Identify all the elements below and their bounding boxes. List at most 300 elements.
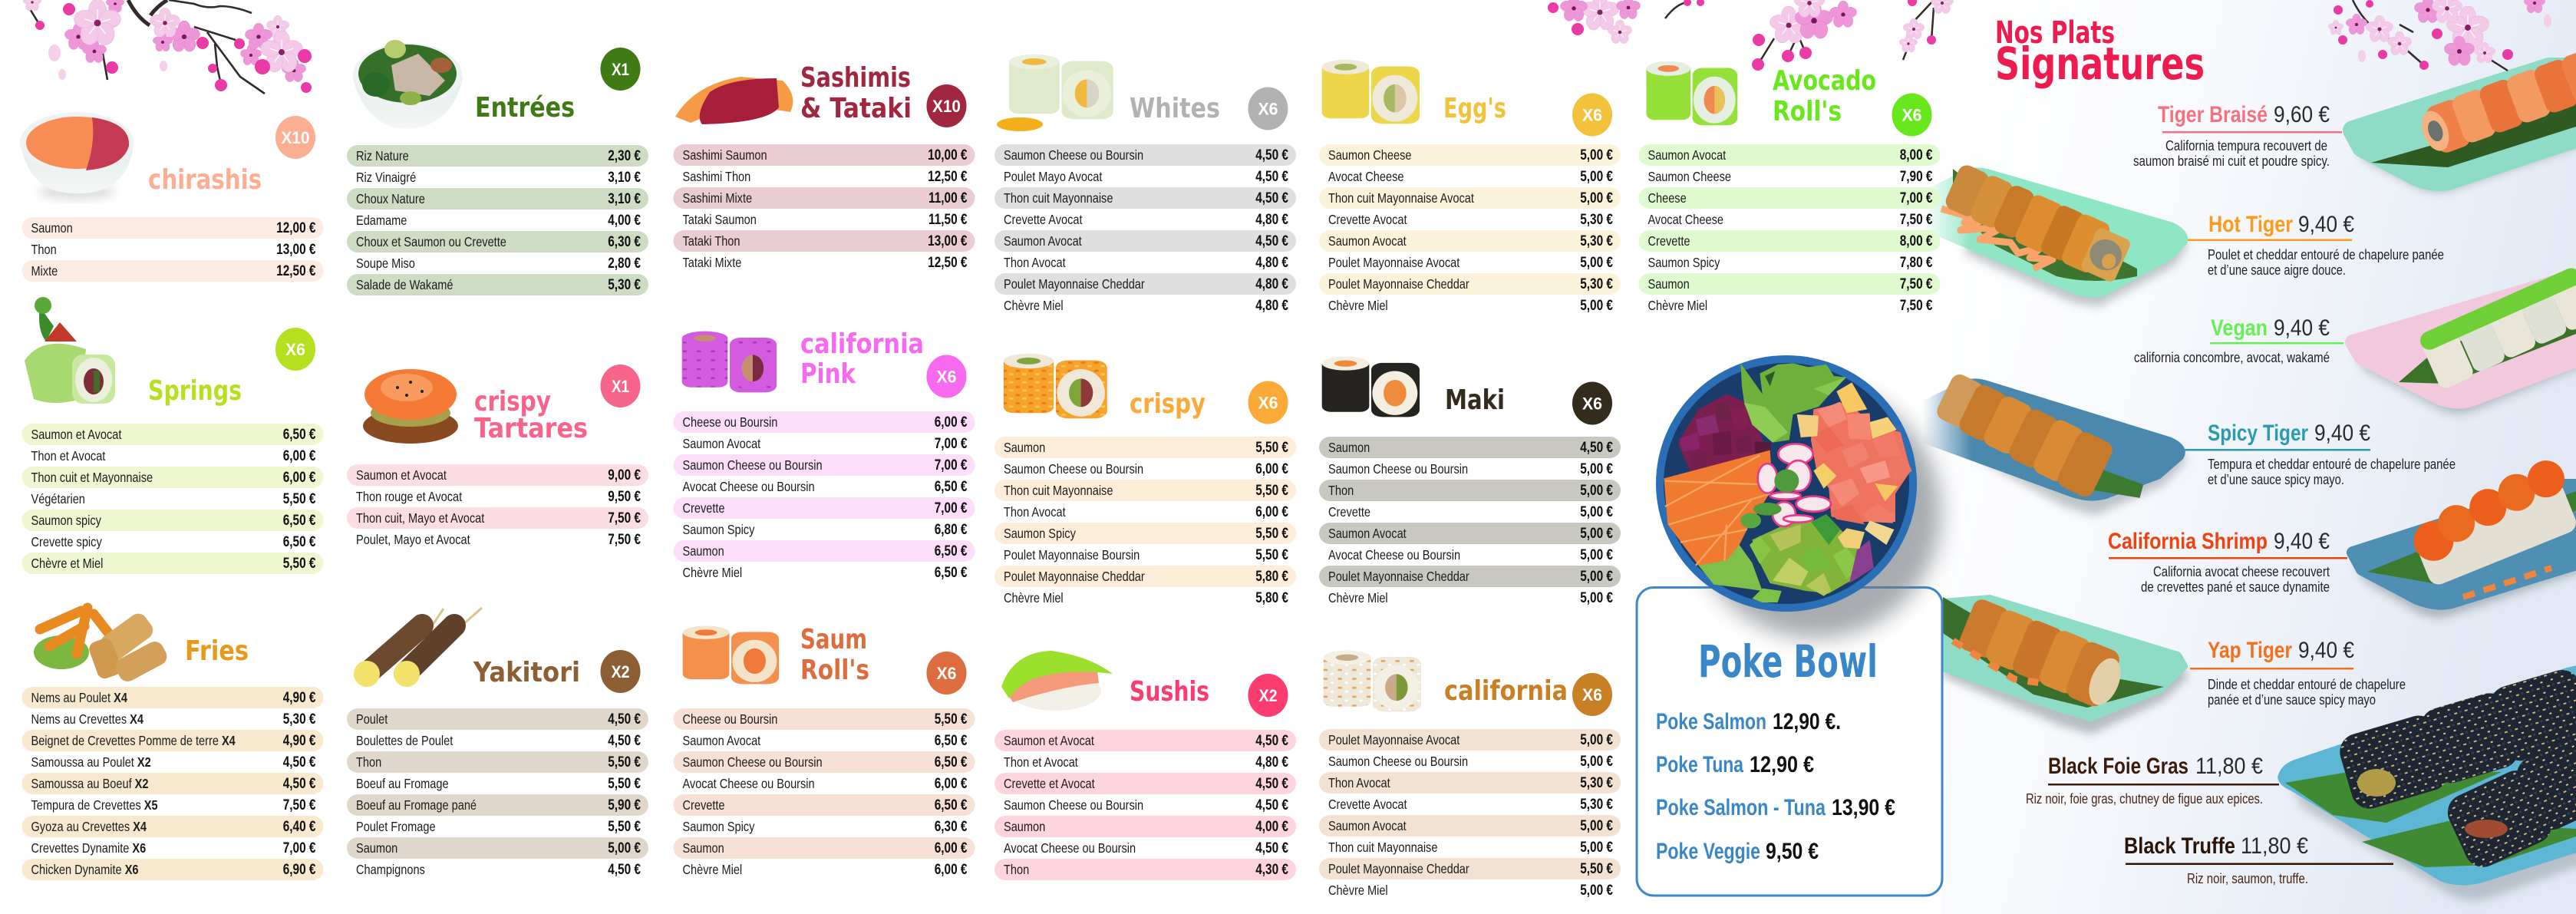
price list: entrées: 5,30 € bbox=[608, 276, 641, 292]
heading: poke bowl: Poke Bowl bbox=[1698, 635, 1878, 688]
plate: Black rolls bbox=[2278, 662, 2576, 901]
price list: california pink: Crevette bbox=[682, 501, 725, 516]
price list: avocado rolls: 8,00 € bbox=[1900, 146, 1933, 163]
image: fries bbox=[34, 608, 170, 685]
price list: saum rolls: Cheese ou Boursin bbox=[682, 712, 777, 727]
price list: yakitori: Saumon bbox=[356, 841, 397, 856]
price list: saum rolls: 6,00 € bbox=[935, 839, 968, 856]
illustration: cherry blossom top left bbox=[23, 0, 312, 94]
price list: avocado rolls bbox=[1639, 144, 1940, 313]
heading: crispy tartares: Tartares bbox=[474, 413, 588, 444]
price list: sushis: Crevette et Avocat bbox=[1004, 777, 1095, 791]
price list: springs: 6,00 € bbox=[283, 468, 316, 485]
price list: maki: 4,50 € bbox=[1580, 438, 1613, 455]
price list: crispy: 5,50 € bbox=[1255, 438, 1288, 455]
price list: crispy: Poulet Mayonnaise Cheddar bbox=[1004, 569, 1145, 584]
price list: fries: Nems au Crevettes X4 bbox=[31, 712, 144, 727]
price list: chirashis: 13,00 € bbox=[276, 240, 316, 257]
heading: eggs: Egg's bbox=[1443, 93, 1506, 124]
image: white rolls bbox=[997, 54, 1113, 131]
price list: sashimis: Tataki Saumon bbox=[682, 213, 757, 227]
item: california shrimp: California Shrimp bbox=[2108, 529, 2268, 554]
price list: california pink: 6,50 € bbox=[935, 563, 968, 580]
price list: sashimis: 13,00 € bbox=[928, 232, 968, 249]
item: black truffe: Black Truffe bbox=[2124, 833, 2235, 859]
price list: chirashis bbox=[21, 217, 324, 282]
price list: crispy: Saumon bbox=[1004, 441, 1045, 455]
price list: avocado rolls: 7,90 € bbox=[1900, 167, 1933, 184]
price list: california pink: Saumon bbox=[682, 544, 724, 559]
price list: entrées: 4,00 € bbox=[608, 211, 641, 228]
price list: california: Saumon Avocat bbox=[1328, 819, 1407, 833]
price list: yakitori: Boulettes de Poulet bbox=[356, 734, 454, 748]
item: tiger braisé: Tiger Braisé bbox=[2158, 102, 2268, 127]
price list: fries: Chicken Dynamite X6 bbox=[31, 863, 139, 877]
price list: avocado rolls: Saumon Cheese bbox=[1648, 170, 1731, 184]
price list: california: Thon cuit Mayonnaise bbox=[1328, 840, 1437, 855]
item: california shrimp bbox=[2108, 529, 2347, 595]
price list: yakitori: Thon bbox=[356, 755, 381, 770]
item: hot tiger: Poulet et cheddar entouré de chapelure panée bbox=[2208, 247, 2444, 262]
price list: sushis: 4,50 € bbox=[1255, 731, 1288, 748]
price list: yakitori: 4,50 € bbox=[608, 860, 641, 877]
price list: california pink: 6,80 € bbox=[935, 520, 968, 537]
badge: X1: X1 bbox=[612, 60, 629, 79]
price list: avocado rolls: 7,50 € bbox=[1900, 275, 1933, 292]
heading: springs: Springs bbox=[148, 375, 242, 407]
item: vegan bbox=[2134, 315, 2343, 365]
price list: sashimis: Tataki Mixte bbox=[682, 256, 741, 270]
price list: crispy: 6,00 € bbox=[1255, 460, 1288, 477]
price list: crispy: Chèvre Miel bbox=[1004, 591, 1064, 605]
price list: sashimis: 10,00 € bbox=[928, 146, 968, 163]
price list: fries: 6,90 € bbox=[283, 860, 316, 877]
panel: chirashis bbox=[20, 112, 324, 282]
panel: crispy tartares bbox=[347, 365, 648, 547]
price list: california pink: 6,50 € bbox=[935, 477, 968, 494]
price list: fries bbox=[21, 687, 324, 880]
price list: springs: Végétarien bbox=[31, 492, 85, 506]
item: black truffe bbox=[2124, 833, 2393, 886]
item: california shrimp: de crevettes pané et sauce dynamite bbox=[2141, 579, 2330, 595]
price list: eggs: 5,00 € bbox=[1580, 189, 1613, 206]
panel: entrées bbox=[347, 40, 648, 295]
price list: sashimis: Sashimi Mixte bbox=[682, 191, 752, 206]
price list: fries: 4,50 € bbox=[283, 774, 316, 791]
price list: california: Poulet Mayonnaise Cheddar bbox=[1328, 862, 1469, 876]
image: salmon rolls bbox=[683, 626, 779, 684]
item: black truffe: 11,80 € bbox=[2241, 833, 2308, 859]
price list: crispy: 5,80 € bbox=[1255, 567, 1288, 584]
price list: springs: 6,00 € bbox=[283, 447, 316, 464]
badge: X6 bbox=[927, 652, 967, 695]
badge: X6: X6 bbox=[1582, 394, 1602, 413]
price list: crispy: 6,00 € bbox=[1255, 503, 1288, 520]
price list: avocado rolls: Avocat Cheese bbox=[1648, 213, 1723, 227]
price list: eggs: Poulet Mayonnaise Avocat bbox=[1328, 256, 1460, 270]
price list: sushis: Saumon et Avocat bbox=[1004, 734, 1094, 748]
badge: X2: X2 bbox=[1258, 686, 1277, 705]
item: poke veggie: Poke Veggie bbox=[1656, 839, 1760, 864]
price list: saum rolls: Saumon Spicy bbox=[682, 820, 755, 834]
price list: crispy: Poulet Mayonnaise Boursin bbox=[1004, 548, 1140, 563]
price list: eggs: Avocat Cheese bbox=[1328, 170, 1403, 184]
price list: maki: Thon bbox=[1328, 483, 1354, 498]
item: yap tiger: 9,40 € bbox=[2298, 638, 2354, 663]
price list: california pink: Chèvre Miel bbox=[682, 566, 742, 580]
price list: eggs: 5,00 € bbox=[1580, 167, 1613, 184]
price list: avocado rolls: Saumon Avocat bbox=[1648, 148, 1727, 163]
plate: Spicy Tiger bbox=[1918, 368, 2187, 516]
price list: saum rolls: 6,30 € bbox=[935, 817, 968, 834]
price list: entrées: Edamame bbox=[356, 213, 407, 228]
price list: yakitori bbox=[347, 708, 648, 877]
price list: entrées: Salade de Wakamé bbox=[356, 278, 454, 292]
illustration: cherry blossom top centre bbox=[1548, 0, 1954, 71]
price list: yakitori: 5,00 € bbox=[608, 839, 641, 856]
heading: crispy tartares: crispy bbox=[474, 386, 551, 417]
price list: crispy: Thon Avocat bbox=[1004, 505, 1066, 520]
badge: X1 bbox=[600, 365, 640, 408]
heading: sashimis & tataki: Sashimis bbox=[800, 62, 911, 94]
price list: crispy tartares bbox=[347, 464, 648, 547]
price list: saum rolls: 6,50 € bbox=[935, 753, 968, 770]
price list: entrées: Riz Nature bbox=[356, 149, 409, 163]
image: salad bowl bbox=[353, 40, 463, 129]
image: sushi bbox=[1001, 651, 1113, 711]
heading: entrées: Entrées bbox=[475, 92, 575, 124]
image: crispy rolls bbox=[1004, 354, 1107, 418]
price list: whites: 4,80 € bbox=[1255, 296, 1288, 313]
item: yap tiger: Dinde et cheddar entouré de chapelure bbox=[2208, 677, 2406, 692]
panel: springs bbox=[21, 297, 324, 574]
price list: avocado rolls: 7,80 € bbox=[1900, 253, 1933, 270]
item: poke tuna: Poke Tuna bbox=[1656, 752, 1743, 777]
heading: nos plats signatures: Nos Plats bbox=[1995, 15, 2115, 51]
item: hot tiger: Hot Tiger bbox=[2208, 212, 2293, 237]
price list: maki: Saumon bbox=[1328, 441, 1370, 455]
image: yakitori skewers bbox=[354, 608, 482, 687]
price list: eggs: 5,00 € bbox=[1580, 146, 1613, 163]
price list: springs: 6,50 € bbox=[283, 533, 316, 549]
price list: yakitori: Poulet bbox=[356, 712, 388, 727]
price list: eggs: 5,00 € bbox=[1580, 296, 1613, 313]
price list: maki bbox=[1319, 437, 1621, 605]
item: spicy tiger: Spicy Tiger bbox=[2208, 421, 2308, 446]
price list: california pink: Avocat Cheese ou Boursin bbox=[682, 480, 815, 494]
price list: saum rolls: 6,00 € bbox=[935, 860, 968, 877]
plate: Tiger Braisé bbox=[2353, 48, 2576, 192]
price list: entrées: Choux Nature bbox=[356, 192, 425, 206]
price list: springs: Saumon spicy bbox=[31, 513, 102, 528]
price list: whites: Poulet Mayo Avocat bbox=[1004, 170, 1103, 184]
item: poke salmon tuna: 13,90 € bbox=[1832, 795, 1895, 820]
badge: X6 bbox=[1248, 87, 1288, 130]
price list: whites: Saumon Cheese ou Boursin bbox=[1004, 148, 1143, 163]
price list: saum rolls bbox=[674, 708, 975, 877]
price list: avocado rolls: 7,00 € bbox=[1900, 189, 1933, 206]
plate: California Shrimp bbox=[2353, 455, 2576, 618]
price list: saum rolls: Saumon Avocat bbox=[682, 734, 761, 748]
price list: sushis: 4,50 € bbox=[1255, 796, 1288, 813]
price list: california pink: Saumon Avocat bbox=[682, 437, 761, 451]
price list: chirashis: 12,50 € bbox=[276, 262, 316, 279]
item: california shrimp: California avocat cheese recouvert bbox=[2153, 564, 2330, 579]
price list: entrées: Soupe Miso bbox=[356, 256, 415, 271]
price list: fries: Tempura de Crevettes X5 bbox=[31, 798, 158, 813]
price list: springs: Saumon et Avocat bbox=[31, 427, 122, 442]
price list: sushis: Thon et Avocat bbox=[1004, 755, 1078, 770]
badge: X2: X2 bbox=[611, 662, 629, 681]
price list: crispy: 5,50 € bbox=[1255, 546, 1288, 563]
price list: springs bbox=[21, 424, 324, 574]
badge: X6 bbox=[1248, 381, 1288, 424]
price list: eggs: Saumon Cheese bbox=[1328, 148, 1411, 163]
price list: california pink: Saumon Cheese ou Boursin bbox=[682, 458, 823, 473]
price list: california: Saumon Cheese ou Boursin bbox=[1328, 754, 1468, 769]
price list: fries: Samoussa au Poulet X2 bbox=[31, 755, 151, 770]
price list: sashimis: Tataki Thon bbox=[682, 234, 740, 249]
price list: california pink: 6,00 € bbox=[935, 413, 968, 430]
price list: whites: 4,50 € bbox=[1255, 232, 1288, 249]
panel: avocado rolls bbox=[1639, 61, 1940, 313]
price list: springs: Crevette spicy bbox=[31, 535, 102, 549]
image: poke bowl bbox=[1656, 355, 1941, 638]
heading: crispy tartares bbox=[474, 386, 588, 444]
price list: entrées: 2,30 € bbox=[608, 147, 641, 163]
price list: crispy tartares: Saumon et Avocat bbox=[356, 468, 447, 483]
item: yap tiger bbox=[2190, 638, 2406, 708]
price list: crispy tartares: 7,50 € bbox=[608, 530, 641, 547]
heading: california pink bbox=[800, 328, 924, 390]
price list: eggs: Chèvre Miel bbox=[1328, 299, 1388, 313]
image: tartare bbox=[363, 369, 458, 444]
price list: yakitori: Boeuf au Fromage bbox=[356, 777, 449, 791]
panel: saum rolls bbox=[674, 624, 975, 877]
item: poke tuna: 12,90 € bbox=[1750, 752, 1814, 777]
heading: yakitori: Yakitori bbox=[473, 657, 580, 688]
heading: nos plats signatures bbox=[1995, 15, 2205, 90]
price list: sushis: 4,50 € bbox=[1255, 839, 1288, 856]
price list: sushis: 4,50 € bbox=[1255, 774, 1288, 791]
price list: entrées bbox=[347, 145, 648, 295]
badge: X10 bbox=[275, 116, 315, 159]
price list: fries: 4,90 € bbox=[283, 688, 316, 705]
badge: X6: X6 bbox=[1901, 106, 1921, 124]
panel: sashimis bbox=[674, 62, 975, 270]
heading: sashimis & tataki: & Tataki bbox=[800, 93, 912, 124]
price list: maki: Saumon Cheese ou Boursin bbox=[1328, 462, 1468, 477]
price list: whites: 4,80 € bbox=[1255, 275, 1288, 292]
price list: avocado rolls: Saumon Spicy bbox=[1648, 256, 1720, 270]
price list: avocado rolls: 7,50 € bbox=[1900, 210, 1933, 227]
price list: california: 5,30 € bbox=[1580, 795, 1613, 812]
price list: springs: Chèvre et Miel bbox=[31, 556, 103, 571]
price list: fries: 7,50 € bbox=[283, 796, 316, 813]
badge: X6: X6 bbox=[1258, 100, 1278, 118]
price list: saum rolls: 6,50 € bbox=[935, 796, 968, 813]
price list: yakitori: 5,50 € bbox=[608, 753, 641, 770]
price list: whites: 4,80 € bbox=[1255, 210, 1288, 227]
image: chirashi bowl bbox=[20, 112, 134, 200]
item: spicy tiger: 9,40 € bbox=[2314, 421, 2370, 446]
panel: signatures background bbox=[1941, 0, 2576, 914]
heading: sushis: Sushis bbox=[1130, 676, 1209, 708]
price list: sashimis: Sashimi Thon bbox=[682, 170, 750, 184]
price list: springs: 6,50 € bbox=[283, 425, 316, 442]
price list: california: 5,50 € bbox=[1580, 860, 1613, 876]
price list: eggs: 5,30 € bbox=[1580, 210, 1613, 227]
badge: X1: X1 bbox=[612, 377, 629, 396]
badge: X6 bbox=[1572, 673, 1612, 716]
price list: crispy: Saumon Cheese ou Boursin bbox=[1004, 462, 1143, 477]
item: yap tiger: Yap Tiger bbox=[2208, 638, 2292, 663]
panel: sushis bbox=[994, 651, 1296, 880]
price list: california pink: 6,50 € bbox=[935, 542, 968, 559]
price list: california: 5,30 € bbox=[1580, 774, 1613, 790]
price list: avocado rolls: 7,50 € bbox=[1900, 296, 1933, 313]
price list: crispy bbox=[994, 437, 1296, 605]
panel: eggs bbox=[1319, 60, 1621, 313]
price list: saum rolls: Crevette bbox=[682, 798, 725, 813]
item: black foie gras: Riz noir, foie gras, chutney de figue aux epices. bbox=[2026, 791, 2263, 807]
item: yap tiger: panée et d’une sauce spicy mayo bbox=[2208, 692, 2376, 708]
price list: entrées: 3,10 € bbox=[608, 168, 641, 185]
badge: X1 bbox=[600, 48, 640, 91]
item: poke salmon: Poke Salmon bbox=[1656, 709, 1766, 734]
price list: entrées: Riz Vinaigré bbox=[356, 170, 416, 185]
illustration: cherry blossom right panel bbox=[2328, 0, 2551, 71]
price list: fries: Nems au Poulet X4 bbox=[31, 691, 128, 705]
price list: sashimis: Sashimi Saumon bbox=[682, 148, 767, 163]
price list: california pink: 7,00 € bbox=[935, 456, 968, 473]
badge: X10 bbox=[927, 84, 967, 127]
badge: X6 bbox=[1572, 382, 1612, 425]
item: spicy tiger: et d’une sauce spicy mayo. bbox=[2208, 472, 2344, 487]
plate: Yap Tiger bbox=[1943, 596, 2188, 734]
price list: sashimis: 12,50 € bbox=[928, 253, 968, 270]
price list: eggs: Poulet Mayonnaise Cheddar bbox=[1328, 277, 1469, 292]
price list: saum rolls: 6,00 € bbox=[935, 774, 968, 791]
price list: sashimis bbox=[674, 144, 975, 270]
panel: whites bbox=[994, 54, 1296, 313]
price list: sushis: Thon bbox=[1004, 863, 1029, 877]
price list: whites: Crevette Avocat bbox=[1004, 213, 1083, 227]
price list: chirashis: Saumon bbox=[31, 221, 73, 236]
price list: entrées: 2,80 € bbox=[608, 254, 641, 271]
item: hot tiger: et d’une sauce aigre douce. bbox=[2208, 262, 2346, 278]
price list: springs: 5,50 € bbox=[283, 554, 316, 571]
price list: maki: 5,00 € bbox=[1580, 460, 1613, 477]
price list: saum rolls: 5,50 € bbox=[935, 710, 968, 727]
panel: california pink bbox=[674, 328, 975, 580]
price list: maki: Chèvre Miel bbox=[1328, 591, 1388, 605]
price list: california pink: 7,00 € bbox=[935, 499, 968, 516]
price list: fries: Crevettes Dynamite X6 bbox=[31, 841, 146, 856]
heading: fries: Fries bbox=[185, 635, 249, 667]
price list: california: 5,00 € bbox=[1580, 881, 1613, 898]
price list: fries: 4,90 € bbox=[283, 731, 316, 748]
price list: maki: 5,00 € bbox=[1580, 481, 1613, 498]
item: poke salmon: 12,90 €. bbox=[1773, 709, 1841, 734]
price list: yakitori: 5,50 € bbox=[608, 817, 641, 834]
price list: crispy tartares: Thon cuit, Mayo et Avocat bbox=[356, 511, 485, 526]
heading: california pink: california bbox=[800, 328, 924, 360]
item: black truffe: Riz noir, saumon, truffe. bbox=[2187, 871, 2308, 886]
item: hot tiger: 9,40 € bbox=[2298, 212, 2354, 237]
badge: X6: X6 bbox=[936, 664, 956, 683]
price list: eggs: Saumon Avocat bbox=[1328, 234, 1407, 249]
item: tiger braisé: 9,60 € bbox=[2274, 102, 2330, 127]
item: black foie gras: 11,80 € bbox=[2195, 754, 2263, 779]
heading: saum rolls: Roll's bbox=[800, 655, 869, 686]
price list: sushis: 4,30 € bbox=[1255, 860, 1288, 877]
price list: maki: 5,00 € bbox=[1580, 589, 1613, 605]
price list: fries: Samoussa au Boeuf X2 bbox=[31, 777, 149, 791]
price list: california: 5,00 € bbox=[1580, 752, 1613, 769]
panel: signature plates bbox=[1918, 48, 2576, 901]
price list: whites bbox=[994, 144, 1296, 313]
price list: entrées: 6,30 € bbox=[608, 233, 641, 249]
price list: whites: 4,50 € bbox=[1255, 167, 1288, 184]
item: california shrimp: 9,40 € bbox=[2274, 529, 2330, 554]
price list: saum rolls: Chèvre Miel bbox=[682, 863, 742, 877]
price list: avocado rolls: 8,00 € bbox=[1900, 232, 1933, 249]
item: black foie gras: Black Foie Gras bbox=[2048, 754, 2188, 779]
price list: whites: Thon cuit Mayonnaise bbox=[1004, 191, 1113, 206]
item: spicy tiger bbox=[2183, 421, 2456, 487]
panel: poke bowl card bbox=[1637, 588, 1942, 896]
price list: entrées: Choux et Saumon ou Crevette bbox=[356, 235, 506, 249]
price list: whites: Thon Avocat bbox=[1004, 256, 1066, 270]
price list: saum rolls: 6,50 € bbox=[935, 731, 968, 748]
badge: X6: X6 bbox=[285, 340, 305, 359]
image: california rolls bbox=[1324, 651, 1421, 711]
price list: eggs bbox=[1319, 144, 1621, 313]
item: vegan: Vegan bbox=[2211, 315, 2268, 341]
price list: eggs: Crevette Avocat bbox=[1328, 213, 1407, 227]
panel: california bbox=[1319, 651, 1621, 898]
heading: chirashis: chirashis bbox=[148, 164, 262, 196]
price list: california: Thon Avocat bbox=[1328, 776, 1390, 790]
price list: saum rolls: Saumon Cheese ou Boursin bbox=[682, 755, 823, 770]
item: tiger braisé: saumon braisé mi cuit et poudre spicy. bbox=[2133, 153, 2330, 169]
image: maki rolls bbox=[1322, 357, 1420, 417]
price list: crispy: 5,50 € bbox=[1255, 524, 1288, 541]
price list: yakitori: Poulet Fromage bbox=[356, 820, 436, 834]
panel: fries bbox=[21, 608, 324, 880]
heading: avocado rolls: Roll's bbox=[1773, 96, 1842, 127]
price list: fries: 5,30 € bbox=[283, 710, 316, 727]
image: spring rolls bbox=[25, 297, 115, 404]
badge: X10: X10 bbox=[932, 97, 961, 116]
heading: california pink: Pink bbox=[800, 358, 856, 390]
badge: X6: X6 bbox=[936, 367, 956, 387]
price list: sashimis: 12,50 € bbox=[928, 167, 968, 184]
price list: fries: 4,50 € bbox=[283, 753, 316, 770]
price list: fries: 7,00 € bbox=[283, 839, 316, 856]
price list: entrées: 3,10 € bbox=[608, 190, 641, 206]
heading: avocado rolls bbox=[1773, 65, 1876, 127]
badge: X6: X6 bbox=[1258, 393, 1278, 413]
price list: sushis bbox=[994, 730, 1296, 880]
price list: california: 5,00 € bbox=[1580, 731, 1613, 747]
item: vegan: california concombre, avocat, wakamé bbox=[2134, 350, 2330, 365]
badge: X10: X10 bbox=[281, 128, 310, 147]
price list: whites: Saumon Avocat bbox=[1004, 234, 1082, 249]
price list: eggs: 5,00 € bbox=[1580, 253, 1613, 270]
heading: california: california bbox=[1444, 675, 1568, 707]
